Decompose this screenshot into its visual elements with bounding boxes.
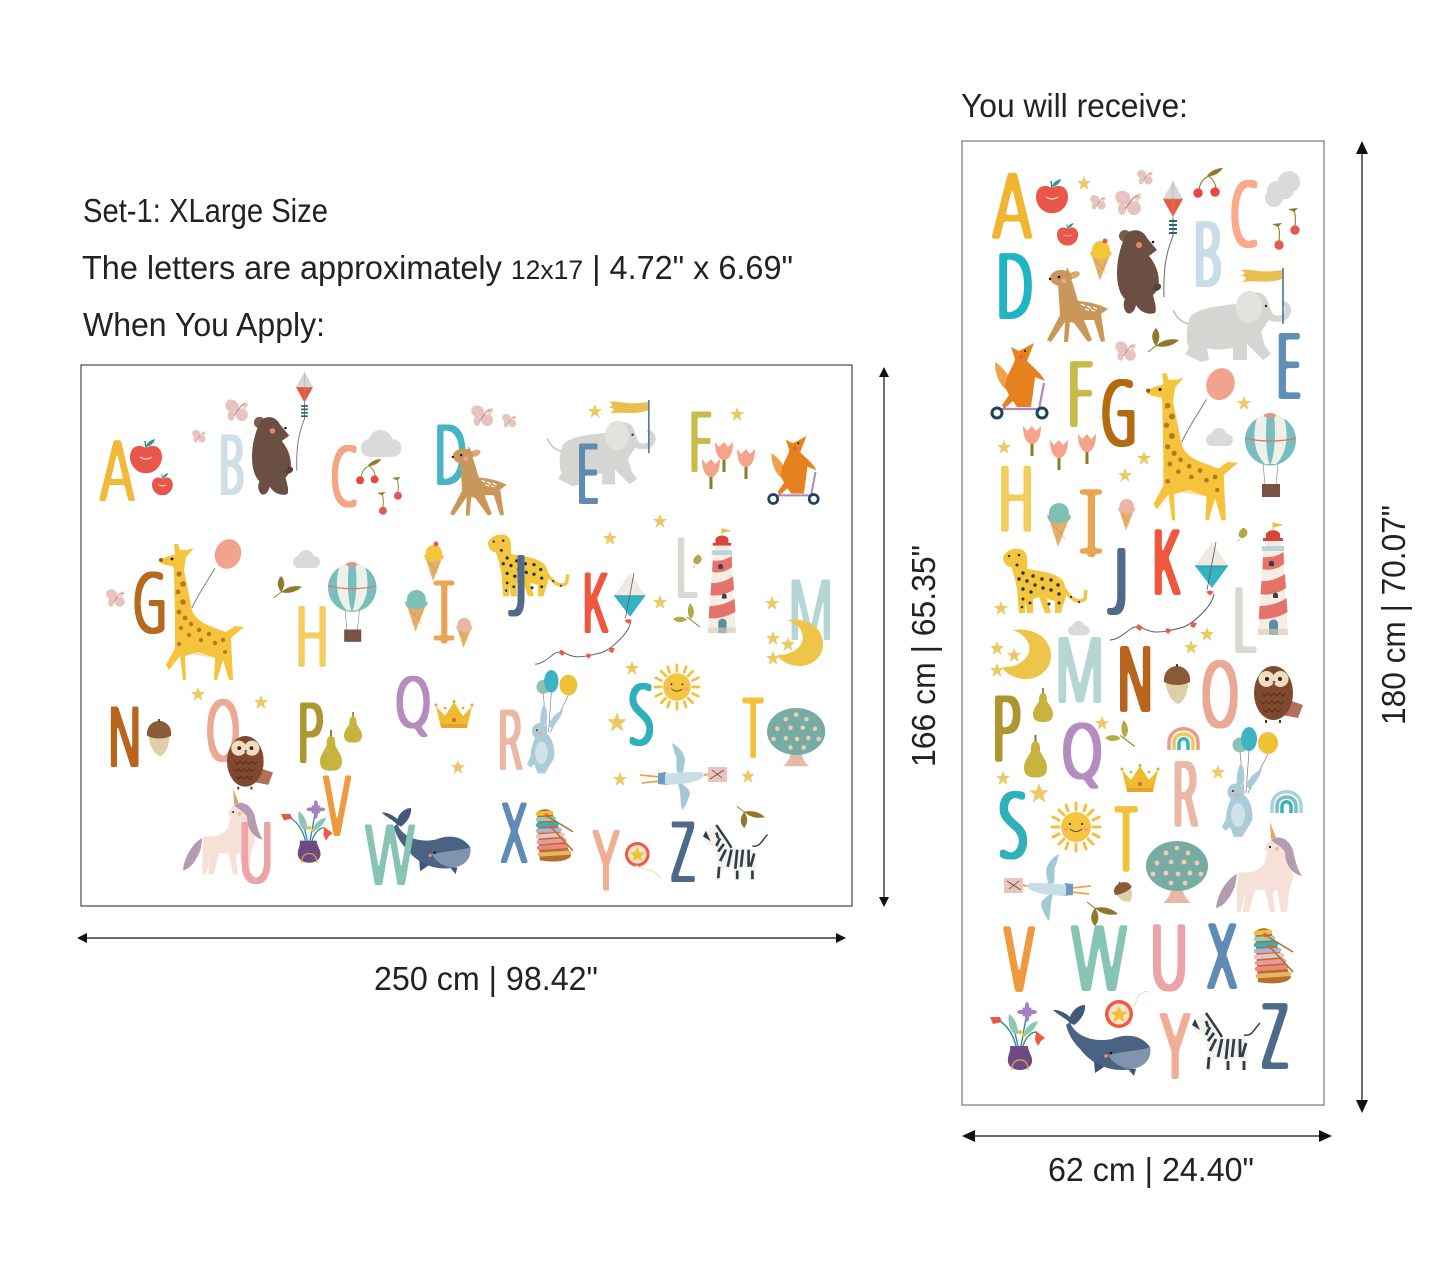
icon: pears [1024,688,1053,778]
label: applied width: 250 cm | 98.42" [374,960,598,997]
letters behind illustrations: D, O, M: O [206,694,240,773]
alphabet letters, sheet: E [1276,324,1302,411]
icon: owl [1254,666,1303,723]
alphabet letters, sheet: C [1231,172,1257,259]
icon: rabbit with balloons [1222,727,1278,837]
icon: leaf [1148,328,1179,352]
icon: xylophone [537,809,573,862]
icon: moon [777,620,823,666]
letters behind illustrations: D, O, M: M [789,572,833,652]
alphabet letters, applied layout: Q [395,670,431,738]
icon: elephant with flag [547,400,656,486]
alphabet letters, applied layout: K [582,565,608,645]
alphabet letters, sheet: F [1068,353,1092,440]
icon: ice creams [405,542,472,648]
icon: kite with garland [535,573,645,664]
alphabet letters, applied layout: N [108,700,141,779]
heading: set size: Set-1: XLarge Size [83,192,328,229]
alphabet letters, applied layout: B [218,428,246,507]
icon: apples [1036,179,1078,245]
alphabet letters, applied layout: Z [671,814,695,894]
alphabet letters, sheet: R [1172,752,1198,839]
icon: giraffe with balloon [1146,364,1239,520]
icon: sun [655,665,699,709]
icon: tree [1146,841,1208,903]
icon: lighthouse [1258,522,1288,635]
letter I bars [1084,492,1098,551]
alphabet letters, sheet: N [1118,638,1152,725]
icon: rabbit with balloons [527,670,577,773]
arrow: applied width [77,933,846,943]
alphabet letters, applied layout: S [627,676,655,757]
icon: butterflies [1088,168,1153,361]
icon: moon [1002,630,1051,679]
alphabet letters, applied layout: A [100,434,134,513]
alphabet letters, applied layout: P [297,696,323,775]
heading: you will receive: You will receive: [961,87,1188,124]
alphabet letters, applied layout: U [239,816,273,895]
alphabet letters, sheet: O [1201,653,1239,740]
icon: acorn [147,719,171,756]
icon: apples [130,439,173,495]
icon: kite with garland [1110,542,1228,640]
icon: leaves near lighthouse [673,555,701,627]
icon: elephant with flag [1173,268,1291,362]
icon: bird with gift [640,743,727,810]
icon: hot air balloon [328,562,376,642]
alphabet letters, sheet: P [992,689,1020,775]
alphabet letters, applied layout: X [501,795,527,875]
arrow: applied height [879,367,889,907]
alphabet letters, applied layout: T [743,689,763,769]
alphabet letters, applied layout: F [689,405,711,484]
icon: whale [1053,1005,1150,1076]
alphabet letters, applied layout: J [509,543,527,623]
alphabet letters, sheet: S [998,783,1028,871]
alphabet letters, sheet: U [1150,917,1188,1003]
icon: tulips [702,442,755,489]
alphabet letters, sheet: K [1152,520,1180,607]
icon: yoyo [625,842,660,878]
icon: cloud and cherries [356,430,402,515]
alphabet letters, sheet: I [1086,478,1096,565]
alphabet letters, applied layout: W [365,818,415,897]
icon: lighthouse [708,528,736,633]
icon: acorn and leaf [1087,878,1137,926]
stars, applied layout [191,404,795,786]
icon: crown [1120,764,1160,792]
alphabet letters, sheet: A [992,165,1032,252]
icon: flower vase [281,800,333,863]
icon: crown [434,700,474,728]
alphabet letters, applied layout: C [331,439,357,519]
icon: hot air balloon [1245,413,1296,497]
icon: unicorn [1216,822,1302,912]
alphabet letters, applied layout: G [132,566,168,645]
alphabet letters, sheet: D [996,245,1034,332]
panel: received sheet [962,141,1324,1105]
arrow: sheet width [962,1130,1332,1142]
alphabet letters, sheet: V [1004,917,1034,1004]
alphabet letters, applied layout: R [498,702,522,782]
alphabet letters, sheet: G [1101,372,1137,459]
icon: tree [767,708,825,766]
alphabet letters, sheet: L [1233,579,1255,666]
alphabet letters, applied layout: I [439,572,449,652]
icon: rainbows [1169,729,1301,813]
icon: zebra and leaf [703,806,768,880]
icon: fox on scooter [990,343,1048,420]
letters behind illustrations: D, O, M: D [434,417,468,497]
icon: small cloud [1206,428,1233,446]
alphabet letters, applied layout: L [675,531,697,610]
label: sheet height: 180 cm | 70.07" [1375,505,1412,725]
icon: pears [320,712,362,771]
alphabet letters, sheet: Q [1061,717,1103,790]
icon: bear with kite [1117,181,1183,314]
alphabet letters, applied layout: E [576,436,600,516]
icon: deer [450,446,507,516]
alphabet letters, applied layout: V [324,768,350,848]
alphabet letters, applied layout [100,405,763,899]
icon: acorn [1164,664,1190,704]
icon: small cloud [1068,621,1090,635]
icon: bird with gift [1004,854,1091,921]
icon: flower vase [990,1002,1045,1070]
alphabet letters, applied layout: H [295,599,329,679]
alphabet letters, applied layout: Y [593,819,619,899]
icon: owl [227,736,273,790]
icon: xylophone [1255,928,1293,983]
stars, sheet [990,176,1251,803]
alphabet letters, sheet [992,165,1302,1087]
icon: leaf [1105,720,1135,746]
icon: fox on scooter [767,436,820,505]
icon: sun [1052,803,1100,851]
alphabet letters, sheet: H [998,458,1034,545]
icon: small leaf near lighthouse [1237,528,1247,542]
icon: leopard [1003,549,1086,613]
alphabet letters, sheet: M [1056,629,1104,716]
alphabet letters, sheet: Z [1262,995,1288,1082]
icon: cherries and cloud [1193,168,1300,250]
icon: yoyo [1105,991,1149,1028]
alphabet letters, sheet: W [1071,917,1127,1004]
label: sheet width: 62 cm | 24.40" [1048,1151,1254,1188]
alphabet letters, sheet: B [1193,214,1223,300]
icon: bear with kite [252,372,313,495]
icon: tulips [1023,426,1096,470]
arrow: sheet height [1356,141,1368,1113]
panel: applied layout [81,365,852,906]
icon: zebra [1192,1013,1260,1071]
icon: giraffe with balloon [159,535,245,680]
heading: when you apply: When You Apply: [83,306,325,343]
icon: ice creams [1047,499,1135,547]
alphabet letters, sheet: J [1108,535,1128,623]
alphabet letters, sheet: T [1116,797,1136,884]
icon: butterflies [104,397,516,607]
icon: leopard [488,534,568,596]
icon: unicorn [183,788,263,874]
alphabet letters, sheet: X [1208,914,1236,1001]
letter I bars [437,583,451,638]
icon: yellow ice cream [1090,238,1112,281]
letters behind illustrations: D, O, M [206,417,833,773]
heading: letter dimensions: The letters are approximately 12x17 | 4.72" x 6.69" [82,249,793,286]
icon: small cloud and leaf [274,550,320,598]
alphabet letters, sheet: Y [1160,1000,1190,1087]
icon: whale [382,808,470,874]
icon: deer [1047,267,1108,342]
label: applied height: 166 cm | 65.35" [905,545,942,767]
